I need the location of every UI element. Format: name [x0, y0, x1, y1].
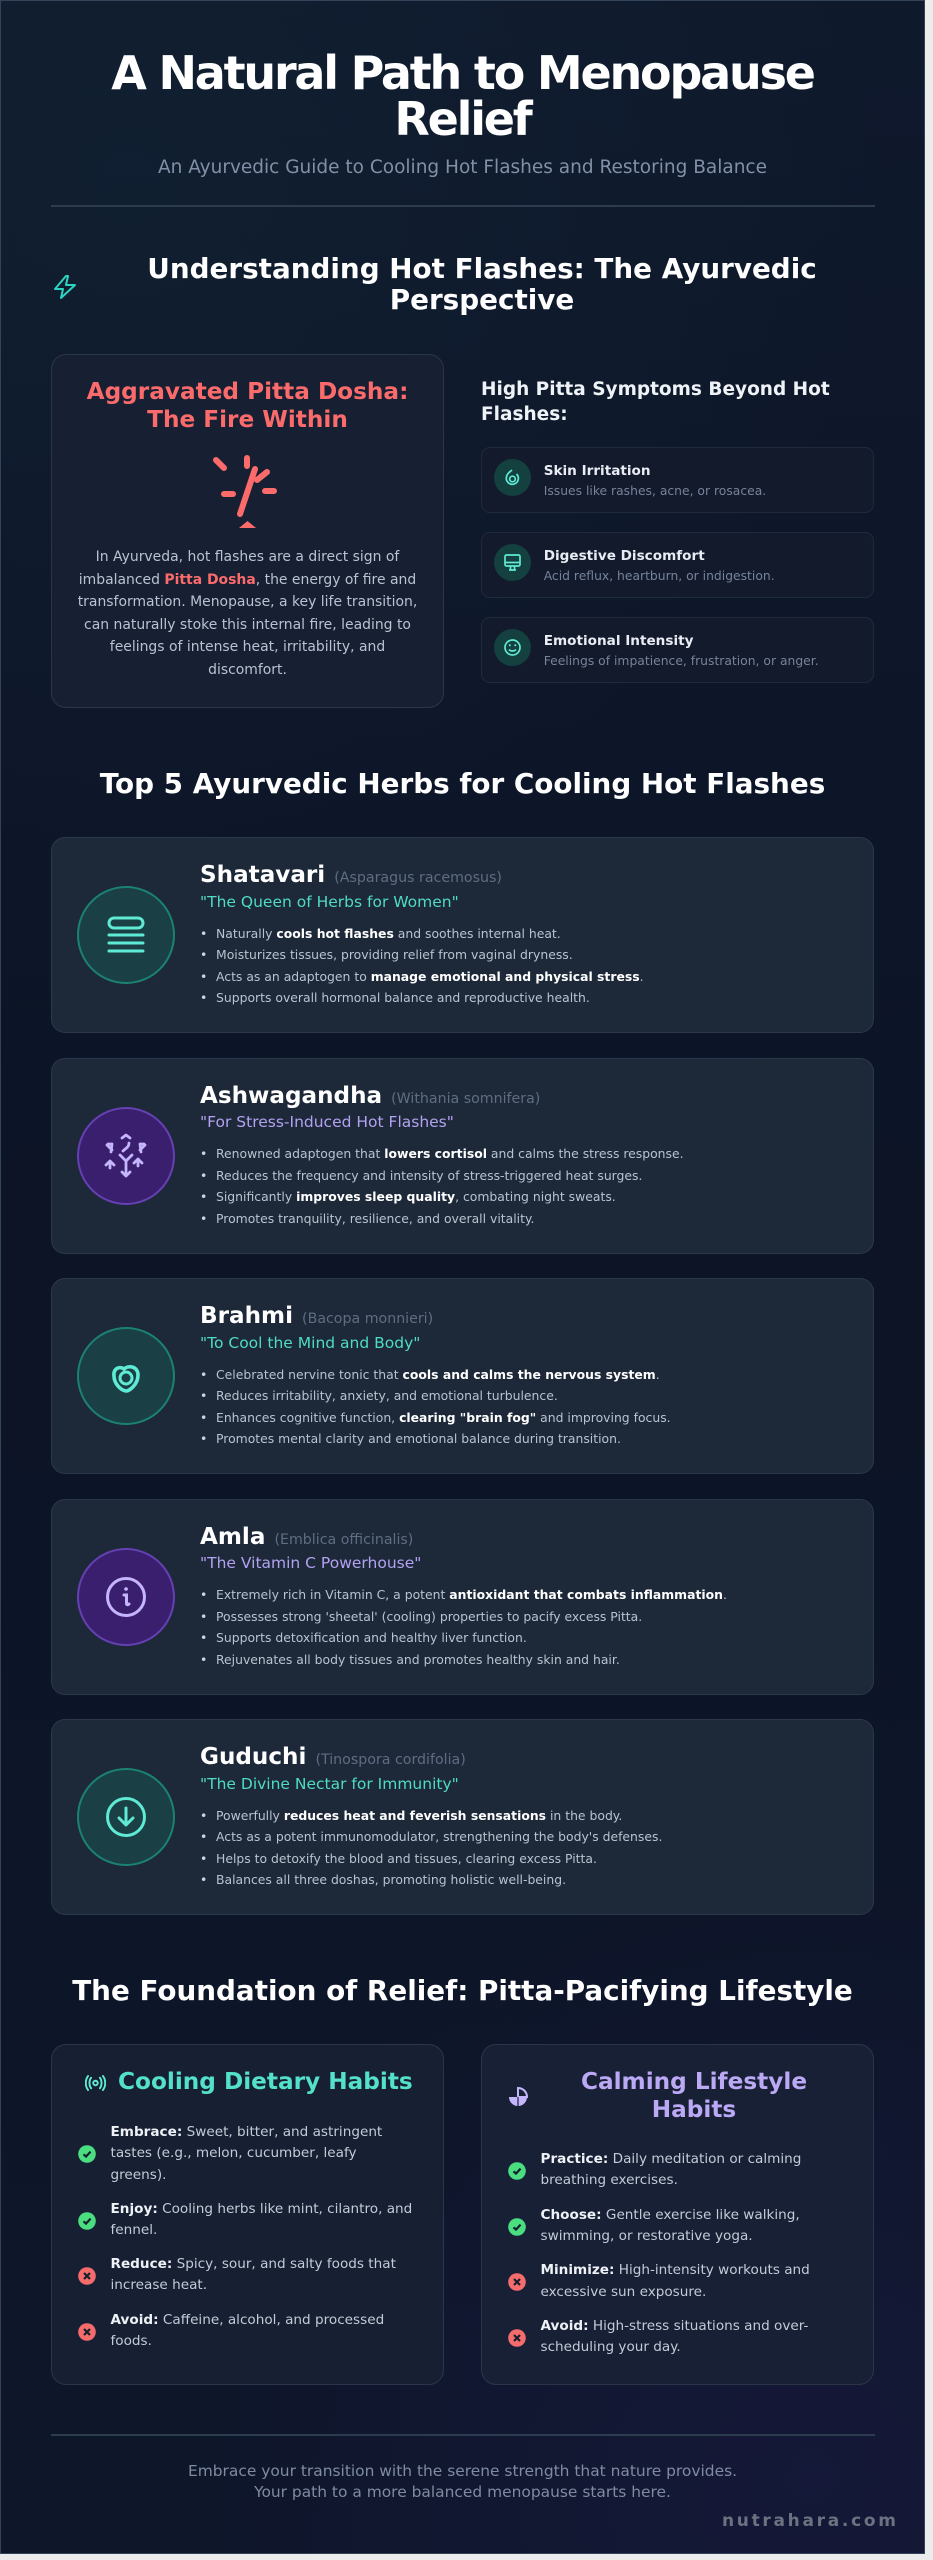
herb card: guduchi: Guduchi (Tinospora cordifolia): [200, 1744, 466, 1770]
icon: amla: [77, 1548, 175, 1646]
footer text: Embrace your transition with the serene strength that nature provides.: [188, 2462, 737, 2480]
herb card: ashwagandha: Promotes tranquility, resilience, and overall vitality.: [216, 1211, 534, 1226]
herb card: ashwagandha: "For Stress-Induced Hot Flashes": [200, 1113, 454, 1131]
footer text: Your path to a more balanced menopause starts here.: [254, 2483, 671, 2501]
herb card: guduchi: [51, 1719, 874, 1915]
heading: calming lifestyle: Calming Lifestyle: [581, 2068, 807, 2095]
symptom: skin irritation: [481, 447, 874, 513]
icon: lightning bolt: [54, 275, 76, 299]
list item: embrace: tastes (e.g., melon, cucumber, leafy: [110, 2145, 357, 2161]
list item: enjoy: Enjoy: Cooling herbs like mint, cilantro, and: [110, 2201, 412, 2217]
list item: practice: [540, 2151, 801, 2188]
icon: emotional: [494, 629, 531, 666]
text: pitta description: [78, 549, 417, 678]
herb card: guduchi: Powerfully reduces heat and feverish sensations in the body.: [216, 1808, 622, 1823]
herb card: amla: Supports detoxification and healthy liver function.: [216, 1630, 527, 1645]
panel: calming lifestyle habits: [481, 2044, 874, 2385]
list item: choose: Choose: Gentle exercise like walking,: [540, 2207, 800, 2223]
text: pitta description: In Ayurveda, hot flashes are a direct sign of: [96, 549, 399, 565]
symptom: digestive discomfort: Digestive Discomfort: [544, 548, 705, 564]
list item: minimize: [540, 2262, 810, 2300]
herb card: guduchi: Helps to detoxify the blood and tissues, clearing excess Pitta.: [216, 1851, 597, 1866]
symptom: emotional intensity: [481, 617, 874, 683]
herb card: shatavari: [51, 837, 874, 1033]
title: A Natural Path to Menopause: [111, 46, 814, 100]
herb card: amla: Rejuvenates all body tissues and promotes healthy skin and hair.: [216, 1652, 620, 1667]
list item: avoid: [540, 2318, 808, 2355]
text: pitta description: feelings of intense heat, irritability, and: [110, 639, 385, 655]
heading: high pitta symptoms: Flashes:: [481, 404, 568, 425]
text: pitta description: discomfort.: [208, 662, 287, 678]
heading: top 5 herbs: Top 5 Ayurvedic Herbs for Cooling Hot Flashes: [100, 766, 825, 800]
heading: aggravated pitta: Aggravated Pitta Dosha:: [87, 378, 408, 405]
herb card: brahmi: "To Cool the Mind and Body": [200, 1334, 420, 1352]
icon: check: [508, 2162, 526, 2180]
list item: choose: swimming, or restorative yoga.: [540, 2228, 753, 2244]
herb card: amla: Extremely rich in Vitamin C, a potent antioxidant that combats inflammation.: [216, 1587, 727, 1602]
list item: choose: [540, 2207, 800, 2244]
herb card: shatavari: Acts as an adaptogen to manage emotional and physical stress.: [216, 969, 644, 984]
list item: reduce: Reduce: Spicy, sour, and salty foods that: [110, 2256, 396, 2272]
text: pitta description: imbalanced Pitta Dosha, the energy of fire and: [79, 572, 416, 588]
herb card: ashwagandha: Ashwagandha (Withania somnifera): [200, 1083, 540, 1109]
symptom: digestive discomfort: [481, 532, 874, 598]
subtitle: An Ayurvedic Guide to Cooling Hot Flashes and Restoring Balance: [158, 157, 767, 178]
list item: avoid: scheduling your day.: [540, 2339, 681, 2355]
herb card: guduchi: Balances all three doshas, promoting holistic well-being.: [216, 1872, 566, 1887]
symptom: skin irritation: Skin Irritation: [544, 462, 651, 478]
icon: fire: [213, 455, 277, 528]
icon: cross: [508, 2273, 526, 2291]
icon: digestive: [494, 544, 531, 581]
heading: high pitta symptoms: [481, 379, 830, 425]
icon: radio waves: [85, 2075, 106, 2091]
herb card: amla: Amla (Emblica officinalis): [200, 1524, 413, 1550]
icon: check: [78, 2212, 96, 2230]
panel: cooling dietary habits: [51, 2044, 444, 2385]
heading: high pitta symptoms: High Pitta Symptoms Beyond Hot: [481, 379, 830, 400]
herb card: amla: Possesses strong 'sheetal' (cooling) properties to pacify excess Pitta.: [216, 1609, 642, 1624]
icon: shatavari: [77, 886, 175, 984]
heading: calming lifestyle: [581, 2068, 807, 2123]
list item: minimize: excessive sun exposure.: [540, 2284, 706, 2300]
list item: embrace: greens).: [110, 2167, 166, 2183]
heading: cooling dietary: Cooling Dietary Habits: [118, 2068, 413, 2095]
symptom: emotional intensity: Feelings of impatience, frustration, or anger.: [544, 654, 819, 668]
herb card: ashwagandha: Renowned adaptogen that lowers cortisol and calms the stress response.: [216, 1146, 684, 1161]
heading: understanding hot flashes: [147, 252, 817, 316]
heading: aggravated pitta: The Fire Within: [147, 406, 348, 433]
icon: cross: [78, 2323, 96, 2341]
icon: cross: [508, 2329, 526, 2347]
icon: pie: [509, 2087, 528, 2106]
herb card: amla: [51, 1498, 874, 1694]
title: Relief: [394, 92, 531, 146]
symptom: digestive discomfort: Acid reflux, heartburn, or indigestion.: [544, 569, 775, 583]
icon: check: [78, 2145, 96, 2163]
icon: cross: [78, 2267, 96, 2285]
title: [111, 46, 814, 146]
list item: minimize: Minimize: High-intensity workouts and: [540, 2262, 810, 2278]
herb card: brahmi: Celebrated nervine tonic that cools and calms the nervous system.: [216, 1367, 660, 1382]
herb card: amla: "The Vitamin C Powerhouse": [200, 1554, 421, 1572]
list item: avoid: foods.: [110, 2333, 152, 2349]
herb card: guduchi: Acts as a potent immunomodulator, strengthening the body's defenses.: [216, 1829, 662, 1844]
herb card: brahmi: Enhances cognitive function, clearing "brain fog" and improving focus.: [216, 1410, 671, 1425]
list item: avoid: Avoid: Caffeine, alcohol, and processed: [110, 2312, 384, 2328]
herb card: shatavari: Moisturizes tissues, providing relief from vaginal dryness.: [216, 947, 573, 962]
herb card: shatavari: Naturally cools hot flashes and soothes internal heat.: [216, 926, 561, 941]
herb card: guduchi: "The Divine Nectar for Immunity": [200, 1774, 459, 1792]
panel: aggravated pitta dosha: [51, 354, 444, 708]
herb card: brahmi: Promotes mental clarity and emotional balance during transition.: [216, 1431, 621, 1446]
text: pitta description: can naturally stoke this internal fire, leading to: [84, 616, 411, 632]
list item: enjoy: [110, 2201, 412, 2238]
list item: practice: Practice: Daily meditation or calming: [540, 2151, 801, 2167]
herb card: ashwagandha: [51, 1058, 874, 1254]
heading: understanding hot flashes: Perspective: [390, 283, 574, 316]
herb card: brahmi: Reduces irritability, anxiety, and emotional turbulence.: [216, 1388, 558, 1403]
text: pitta description: transformation. Menopause, a key life transition,: [78, 594, 417, 610]
icon: guduchi: [77, 1768, 175, 1866]
icon: brahmi: [77, 1327, 175, 1425]
watermark: nutrahara.com: [722, 2511, 899, 2531]
heading: aggravated pitta: [86, 378, 408, 433]
icon: ashwagandha: [77, 1106, 175, 1204]
herb card: shatavari: Shatavari (Asparagus racemosus): [200, 862, 502, 888]
symptom: skin irritation: Issues like rashes, acne, or rosacea.: [544, 484, 766, 498]
list item: enjoy: fennel.: [110, 2222, 157, 2238]
herb card: ashwagandha: Reduces the frequency and intensity of stress-triggered heat surges.: [216, 1168, 642, 1183]
list item: practice: breathing exercises.: [540, 2172, 678, 2188]
list item: avoid: [110, 2312, 384, 2349]
footer text: [188, 2462, 737, 2501]
symptom: emotional intensity: Emotional Intensity: [544, 632, 693, 648]
icon: skin: [494, 459, 531, 496]
list item: embrace: Embrace: Sweet, bitter, and astringent: [110, 2124, 382, 2140]
herb card: brahmi: Brahmi (Bacopa monnieri): [200, 1303, 433, 1329]
heading: understanding hot flashes: Understanding Hot Flashes: The Ayurvedic: [147, 252, 817, 285]
herb card: ashwagandha: Significantly improves sleep quality, combating night sweats.: [216, 1189, 616, 1204]
heading: calming lifestyle: Habits: [652, 2096, 736, 2123]
herb card: shatavari: "The Queen of Herbs for Women": [200, 892, 459, 910]
list item: reduce: [110, 2256, 396, 2293]
icon: check: [508, 2218, 526, 2236]
list item: reduce: increase heat.: [110, 2277, 207, 2293]
list item: embrace: [110, 2124, 382, 2183]
herb card: shatavari: Supports overall hormonal balance and reproductive health.: [216, 990, 590, 1005]
heading: foundation of relief: The Foundation of Relief: Pitta-Pacifying Lifestyle: [72, 1974, 853, 2006]
herb card: brahmi: [51, 1278, 874, 1474]
list item: avoid: Avoid: High-stress situations and over-: [540, 2318, 808, 2334]
